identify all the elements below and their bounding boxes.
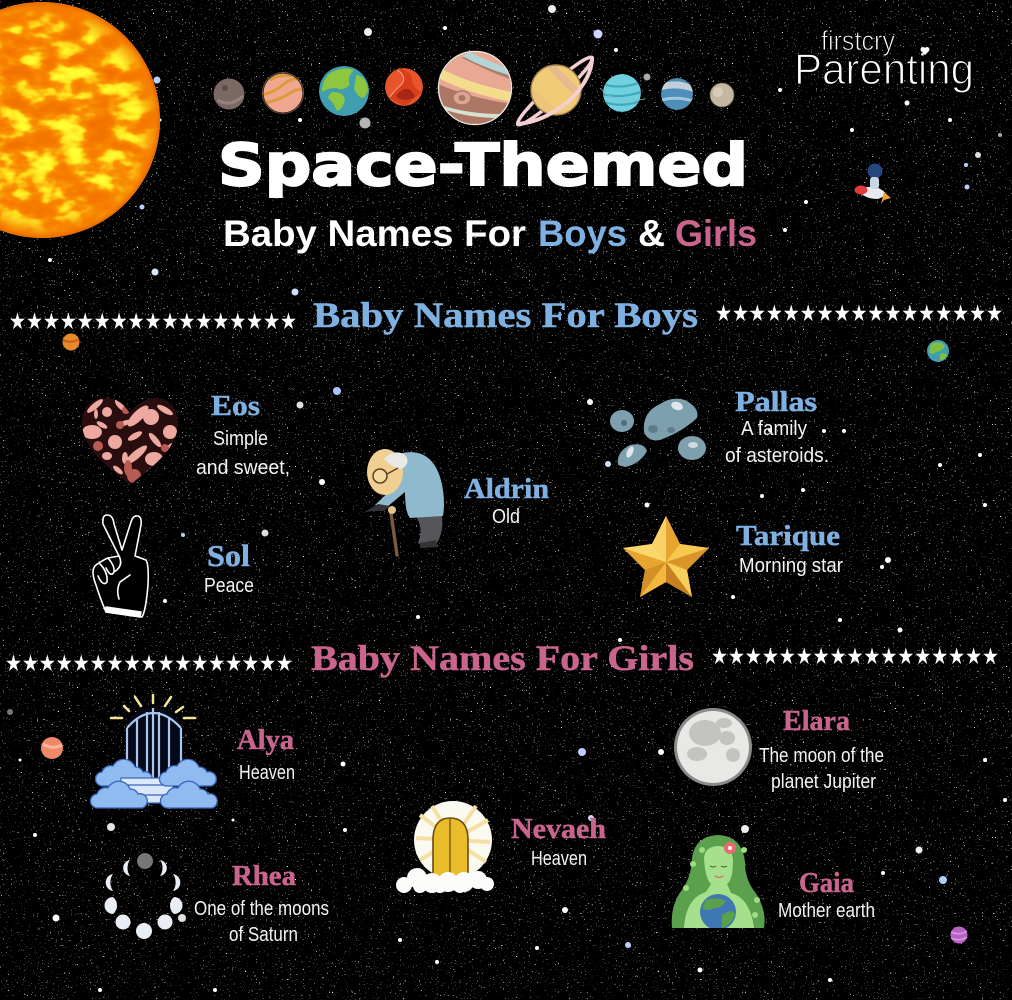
heading: girls: Baby Names For Girls (311, 638, 694, 678)
icon: mother earth (672, 835, 765, 930)
meaning: of Saturn (229, 924, 298, 946)
planet: saturn (516, 56, 594, 126)
item: Nevaeh (396, 801, 606, 893)
moons (360, 74, 650, 128)
upper right cloud (159, 759, 216, 786)
icon: astronaut on rocket (854, 164, 891, 204)
planet: pluto (710, 83, 734, 107)
planet: venus (262, 72, 304, 114)
meaning: Mother earth (778, 900, 875, 922)
subtitle: Baby Names For (223, 213, 526, 254)
planet: mercury (214, 78, 244, 110)
small planet: purple (950, 926, 968, 944)
name: Elara (783, 705, 850, 737)
meaning: Peace (204, 575, 254, 597)
meaning: Heaven (239, 762, 295, 784)
icon: peace hand (93, 515, 148, 617)
meaning: planet Jupiter (771, 771, 876, 793)
meaning: and sweet, (196, 457, 290, 479)
item: Sol (93, 515, 254, 617)
logo: firstcry parenting: Parenting (794, 45, 974, 94)
meaning: A family (741, 418, 807, 440)
upper left cloud (95, 759, 152, 786)
heading: boys: Baby Names For Boys (313, 295, 698, 335)
small planet: salmon (41, 737, 63, 759)
meaning: Morning star (739, 555, 843, 577)
icon: golden door on cloud (396, 801, 494, 893)
subtitle: Boys (538, 213, 627, 254)
meaning: of asteroids. (725, 445, 829, 467)
meaning (196, 428, 290, 479)
icon: old man with cane (363, 449, 444, 555)
planet: uranus (600, 74, 645, 112)
logo: firstcry parenting: firstcry (821, 25, 895, 56)
name: Rhea (232, 860, 296, 892)
item: Alya (90, 695, 295, 808)
name: Pallas (735, 386, 817, 418)
subtitle: Girls (675, 213, 757, 254)
logo: firstcry parenting (794, 25, 974, 94)
meaning (725, 418, 829, 467)
meaning: Old (492, 506, 520, 528)
section: baby names for boys (9, 295, 1003, 335)
icon: gold star (623, 516, 709, 597)
sun (0, 0, 165, 240)
small planet: orange (62, 334, 80, 350)
item: Tarique (623, 516, 843, 597)
lower right cloud (160, 781, 217, 808)
item: Gaia (672, 835, 875, 930)
star row: left: ★★★★★★★★★★★★★★★★★ (5, 651, 293, 677)
small planet: earth (927, 340, 949, 362)
name: Eos (211, 390, 260, 422)
item: Aldrin (363, 449, 549, 555)
meaning: Heaven (531, 848, 587, 870)
planet: earth (319, 66, 369, 116)
name: Sol (207, 538, 250, 573)
name: Tarique (736, 520, 840, 552)
item: Eos (82, 390, 290, 485)
item: Pallas (610, 386, 829, 467)
name: Nevaeh (511, 813, 606, 845)
icon: floral heart (82, 397, 178, 485)
name: Gaia (799, 867, 854, 899)
meaning: The moon of the (759, 745, 884, 767)
meaning (759, 745, 884, 793)
icon: full moon (674, 708, 752, 786)
item: Rhea (104, 853, 329, 946)
name: Aldrin (464, 473, 549, 505)
item: Elara (674, 705, 884, 793)
title: Space-Themed (218, 131, 748, 199)
meaning: Simple (213, 428, 268, 450)
planet: neptune (661, 78, 693, 110)
icon: asteroids (610, 399, 706, 467)
lower left cloud (90, 781, 147, 808)
meaning: One of the moons (194, 898, 329, 920)
name: Alya (237, 724, 294, 756)
icon: heaven gate (90, 695, 217, 808)
planets row (214, 52, 734, 130)
planet: jupiter (438, 52, 512, 124)
icon: moon phases (104, 853, 182, 939)
subtitle (223, 213, 757, 254)
section: baby names for girls (5, 638, 999, 678)
planet: mars (385, 68, 423, 106)
meaning (194, 898, 329, 946)
star row: left: ★★★★★★★★★★★★★★★★★ (9, 309, 297, 335)
subtitle: & (638, 213, 665, 254)
